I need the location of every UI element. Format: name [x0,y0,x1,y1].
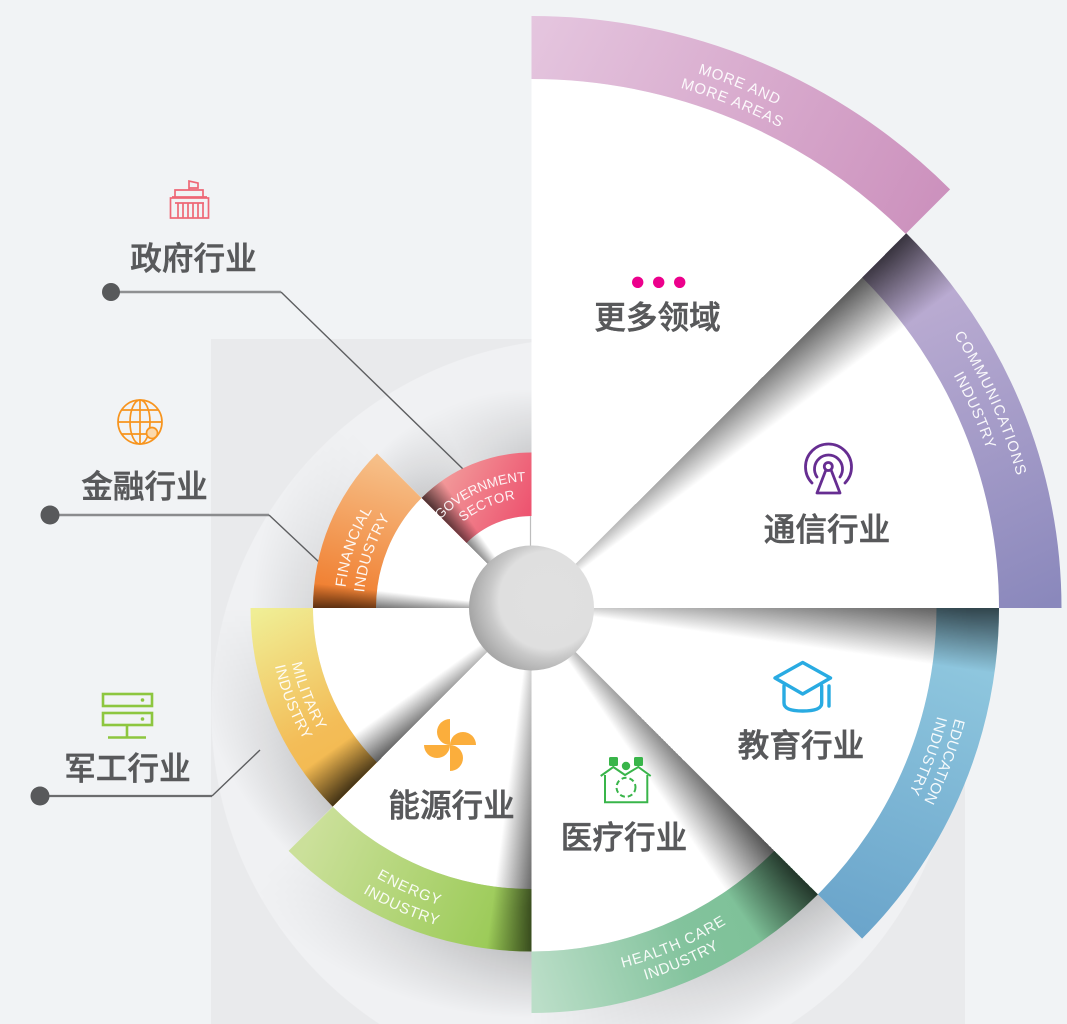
heading: more areas: 更多领域 [594,300,721,336]
icon: globe [118,400,162,444]
heading: military: 军工行业 [64,750,191,786]
panel: military [250,608,487,807]
icon: medical house [601,757,651,802]
band label: education: EDUCATION [924,719,965,805]
white sector: energy [333,608,532,889]
band label: communications: INDUSTRY [954,371,996,446]
band label: military [275,662,327,736]
panel: energy [288,652,532,952]
white sector: government [466,516,532,608]
band label: communications: COMMUNICATIONS [956,332,1026,474]
band label: more areas: MORE AREAS [682,78,783,126]
icon: government building [170,181,208,218]
leader: military [30,750,260,806]
background circle [211,338,959,1024]
band: energy [289,807,532,952]
heading: energy: 能源行业 [388,788,515,824]
white sector: education [532,608,936,894]
band label: military: INDUSTRY [275,664,313,736]
panel: education [576,608,999,939]
band: financial [313,454,422,608]
center hub [469,546,594,670]
white sector: health care [532,608,774,952]
panel: health care [532,652,818,1013]
left callouts and hub [64,180,594,786]
band label: energy: INDUSTRY [364,884,440,924]
heading: communications: 通信行业 [764,512,890,548]
band label: energy [364,869,442,924]
band label: military: MILITARY [292,662,327,727]
heading: finance: 金融行业 [81,468,208,504]
panel: more areas [532,16,950,564]
band: government [422,452,532,543]
icon: antenna [806,444,852,493]
band: more areas [532,16,950,234]
band: military [250,608,377,807]
band label: financial [335,510,388,592]
band: health care [532,851,818,1013]
white sector: military [313,608,532,762]
band label: energy: ENERGY [378,869,442,904]
band label: more areas: MORE AND [699,64,780,103]
band label: government: SECTOR [459,490,515,520]
band label: health care: INDUSTRY [644,940,716,980]
heading: education: 教育行业 [738,728,864,764]
icon: graduation cap [775,662,830,711]
white sector: more areas [532,79,906,608]
panel: communications [576,233,1062,608]
leader: finance [40,506,319,562]
icon: three dots [632,277,685,288]
band label: financial: FINANCIAL [335,510,372,586]
icon: pinwheel [424,719,476,771]
panel: financial [313,454,487,608]
heading: government: 政府行业 [130,240,257,276]
white sector: financial [376,498,532,608]
leader: government [102,283,464,470]
band: communications [862,233,1062,608]
leader lines [30,283,464,806]
band: education [818,608,999,939]
band label: financial: INDUSTRY [354,512,388,592]
heading: health care: 医疗行业 [561,820,687,856]
band label: health care: HEALTH CARE [621,916,726,968]
white sector: communications [532,277,999,608]
icon: server [103,694,152,738]
band label: education: INDUSTRY [911,717,947,796]
band label: government: GOVERNMENT [436,472,525,518]
background panel [211,339,965,1024]
panel: government [422,452,532,564]
